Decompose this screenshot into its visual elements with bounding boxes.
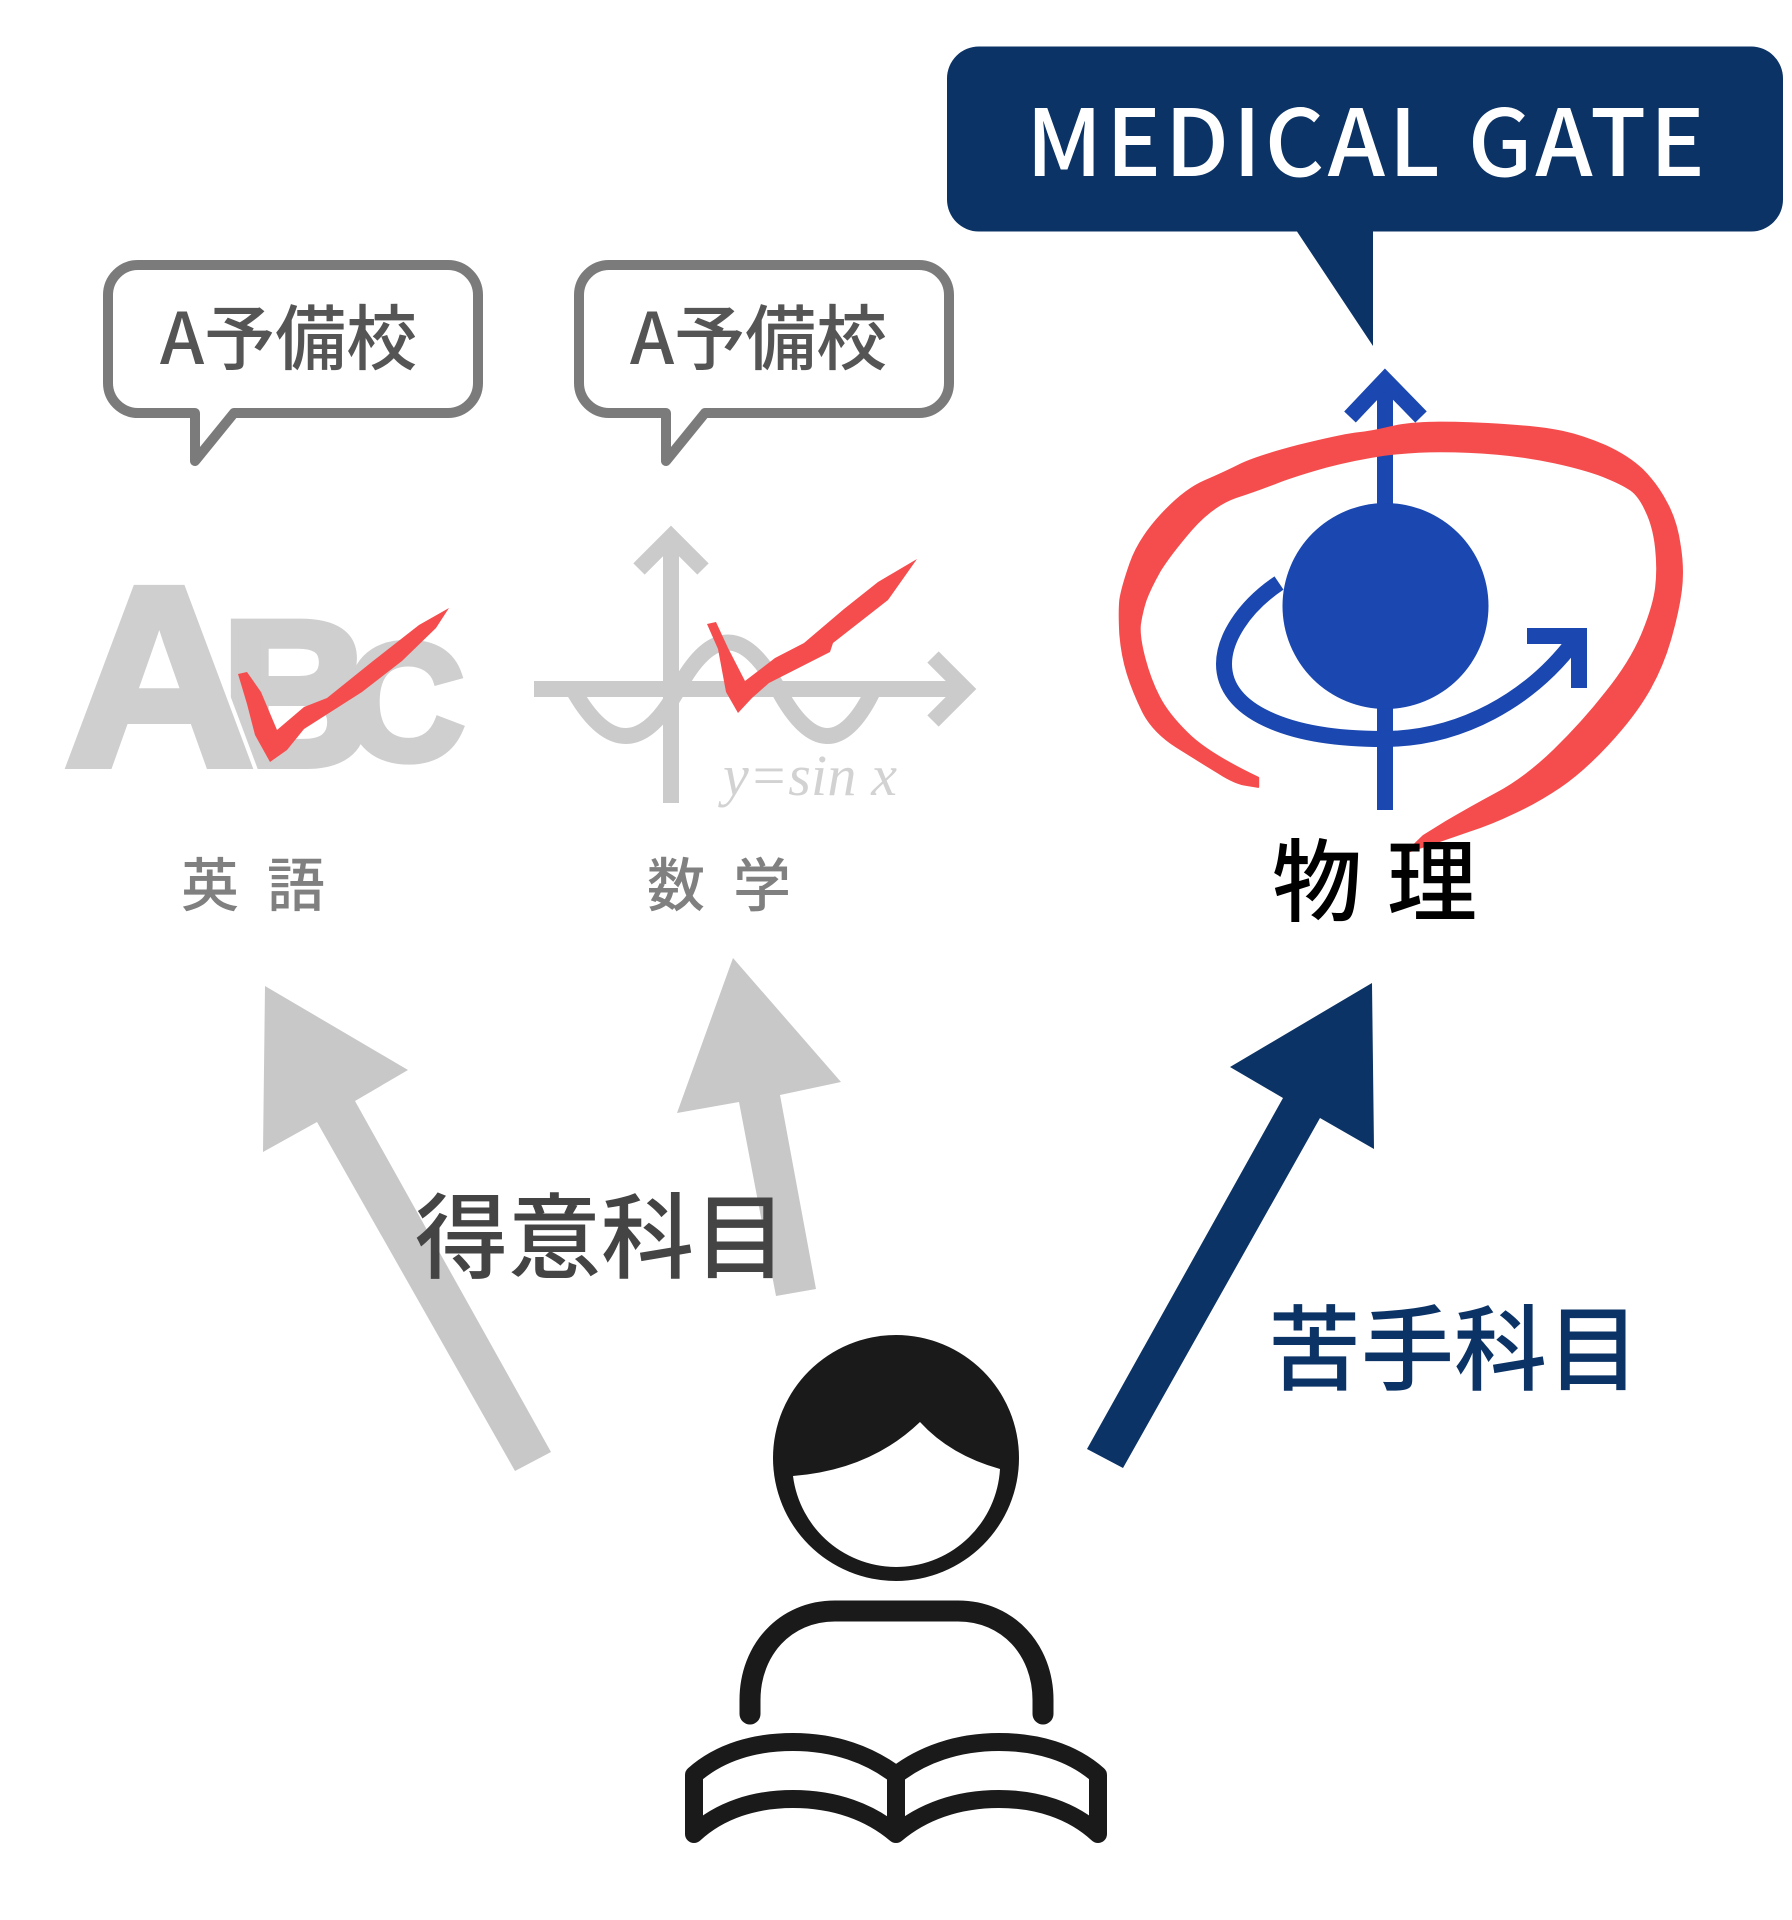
icon: ABC letters: C bbox=[345, 610, 464, 794]
icon: physics atom bbox=[1224, 380, 1579, 810]
callout: A prep school (Math): A予備校 bbox=[630, 283, 887, 385]
callout: MEDICAL GATE bbox=[947, 46, 1783, 346]
label: Physics: 物理 bbox=[1272, 810, 1502, 940]
body bbox=[750, 1611, 1043, 1714]
icon: ABC letters: A bbox=[64, 534, 254, 820]
label: weak subjects: 苦手科目 bbox=[1268, 1275, 1640, 1410]
formula label: y=sin x bbox=[718, 743, 897, 808]
label: Math: 数学 bbox=[647, 839, 819, 923]
icon: red check on graph bbox=[707, 559, 917, 713]
icon: sine graph bbox=[534, 537, 965, 803]
head bbox=[773, 1335, 1019, 1581]
callout: MEDICAL GATE: MEDICAL GATE bbox=[1026, 70, 1705, 203]
icon: ABC letters: A bbox=[64, 534, 254, 820]
icon: ABC letters: B bbox=[221, 578, 370, 809]
label: strong subjects: 得意科目 bbox=[415, 1163, 787, 1298]
label: English: 英語 bbox=[181, 839, 353, 923]
icon: person reading bbox=[694, 1335, 1098, 1834]
callout: A prep school (English) bbox=[108, 265, 478, 461]
arrow: to English bbox=[263, 986, 551, 1471]
callout: A prep school (English): A予備校 bbox=[160, 283, 417, 385]
book bbox=[694, 1742, 1098, 1834]
arrow: to Physics bbox=[1087, 983, 1374, 1468]
icon: ABC letters bbox=[64, 534, 464, 820]
red hand-drawn circle bbox=[1120, 423, 1682, 852]
icon: red check on ABC bbox=[238, 608, 449, 762]
callout: A prep school (Math) bbox=[579, 265, 949, 461]
arrow: to Math bbox=[677, 958, 841, 1296]
